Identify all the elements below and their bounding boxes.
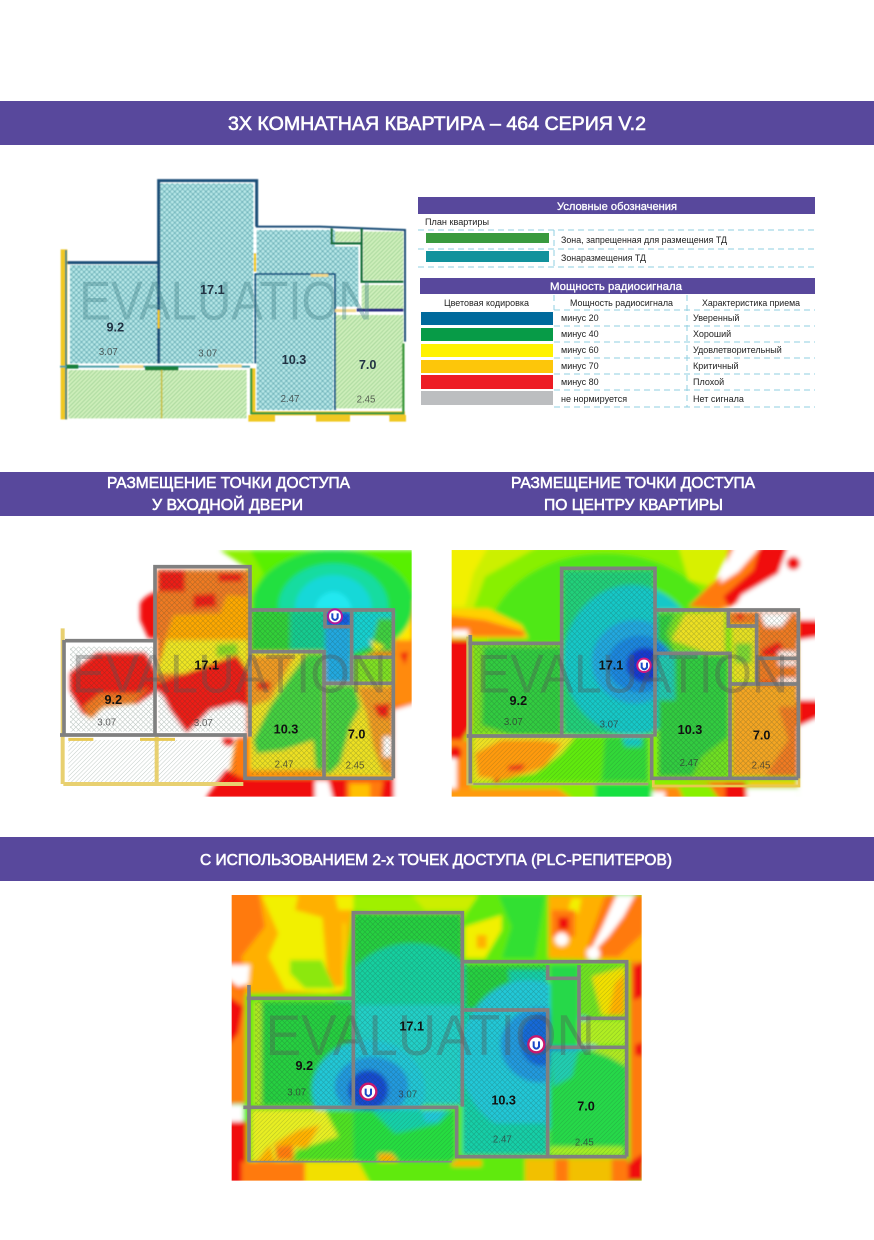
legend heading (418, 197, 815, 214)
room labels: 2.47 (275, 759, 293, 770)
room labels: 9.2 (107, 321, 124, 335)
watermark: EVALUATION (477, 643, 788, 705)
room labels: 10.3 (274, 722, 298, 736)
legend: signal power table: Мощность радиосигнала (570, 298, 673, 308)
legend: signal power table: Хороший (693, 329, 731, 339)
floor plan: zoning of apartment (60, 181, 406, 419)
banner: placement headings: ПО ЦЕНТРУ КВАРТИРЫ (544, 497, 723, 514)
legend: signal power table: Цветовая кодировка (444, 298, 529, 308)
heatmap: access point at centre of apartment (445, 545, 820, 807)
room labels (504, 658, 770, 772)
icon: access point 2 (528, 1036, 544, 1052)
room labels: 3.07 (287, 1087, 306, 1098)
room labels: 17.1 (399, 1020, 424, 1034)
table heading: Мощность радиосигнала (550, 281, 683, 293)
banner: two access points heading (0, 837, 874, 881)
room labels: 3.07 (99, 347, 118, 358)
room labels: 10.3 (282, 353, 306, 367)
legend: signal power table: минус 60 (561, 345, 599, 355)
room labels: 17.1 (599, 658, 623, 672)
legend: signal power table: минус 70 (561, 361, 599, 371)
heatmap: two access points (225, 890, 648, 1187)
room labels: 10.3 (491, 1094, 516, 1108)
room labels: 2.45 (357, 395, 375, 406)
watermark: EVALUATION (79, 269, 373, 331)
room labels: 2.47 (281, 394, 299, 405)
banner: main title (0, 101, 874, 145)
banner: placement headings (0, 472, 874, 516)
room labels: 9.2 (105, 693, 122, 707)
legend: signal power table: Критичный (693, 361, 739, 371)
banner: main title: 3Х КОМНАТНАЯ КВАРТИРА – 464 СЕРИЯ V.2 (228, 114, 646, 135)
room labels (97, 658, 365, 772)
legend: symbols (418, 197, 815, 267)
room labels (99, 283, 376, 406)
room labels: 9.2 (510, 694, 527, 708)
legend: signal power table (420, 278, 815, 407)
room labels: 10.3 (678, 723, 702, 737)
legend: signal power table: Уверенный (693, 313, 739, 323)
room labels: 17.1 (194, 658, 219, 672)
legend heading: Условные обозначения (557, 201, 677, 213)
rooms (252, 913, 627, 1162)
room labels: 3.07 (194, 718, 213, 729)
watermark: EVALUATION (266, 1004, 595, 1068)
watermark: EVALUATION (72, 643, 387, 705)
heatmap: access point at entrance door (60, 550, 417, 800)
room labels: 2.45 (346, 761, 364, 772)
room labels: 7.0 (359, 358, 376, 372)
legend: signal power table: Характеристика приема (702, 298, 800, 308)
room labels: 3.07 (600, 719, 618, 730)
legend: signal power table: Удовлетворительный (693, 345, 782, 355)
room labels: 2.47 (680, 758, 698, 769)
banner: placement headings: У ВХОДНОЙ ДВЕРИ (152, 495, 303, 514)
legend: symbols: План квартиры (425, 217, 489, 227)
legend: symbols: Зонаразмещения ТД (561, 253, 646, 263)
legend: signal power table: Плохой (693, 377, 724, 387)
icon: access point (328, 609, 342, 623)
legend: symbols: Зона, запрещенная для размещения ТД (561, 235, 727, 245)
room labels: 9.2 (296, 1059, 313, 1073)
room labels: 2.47 (493, 1135, 512, 1146)
banner: two access points heading: С ИСПОЛЬЗОВАНИЕМ 2-х ТОЧЕК ДОСТУПА (PLC-РЕПИТЕРОВ) (200, 852, 672, 869)
banner: placement headings: РАЗМЕЩЕНИЕ ТОЧКИ ДОСТУПА (511, 475, 755, 492)
room labels: 7.0 (753, 728, 770, 742)
room labels: 2.45 (575, 1137, 594, 1148)
banner: placement headings: РАЗМЕЩЕНИЕ ТОЧКИ ДОСТУПА (107, 475, 350, 492)
table heading (420, 278, 815, 294)
legend: signal power table: минус 40 (561, 329, 599, 339)
rooms (473, 643, 562, 735)
room labels: 7.0 (577, 1100, 595, 1114)
legend: signal power table: не нормируется (561, 394, 627, 404)
rooms (152, 568, 254, 686)
room labels: 2.45 (752, 761, 770, 772)
icon: access point 1 (360, 1084, 376, 1100)
icon: access point (637, 659, 651, 672)
room labels: 17.1 (200, 283, 225, 297)
legend: signal power table: Нет сигнала (693, 394, 744, 404)
legend: signal power table: минус 80 (561, 377, 599, 387)
room labels: 7.0 (348, 728, 365, 742)
room labels: 3.07 (198, 349, 217, 360)
room labels: 3.07 (504, 717, 523, 728)
room labels (287, 1020, 595, 1148)
legend: signal power table: минус 20 (561, 313, 599, 323)
room labels: 3.07 (398, 1089, 417, 1100)
room labels: 3.07 (97, 717, 116, 728)
